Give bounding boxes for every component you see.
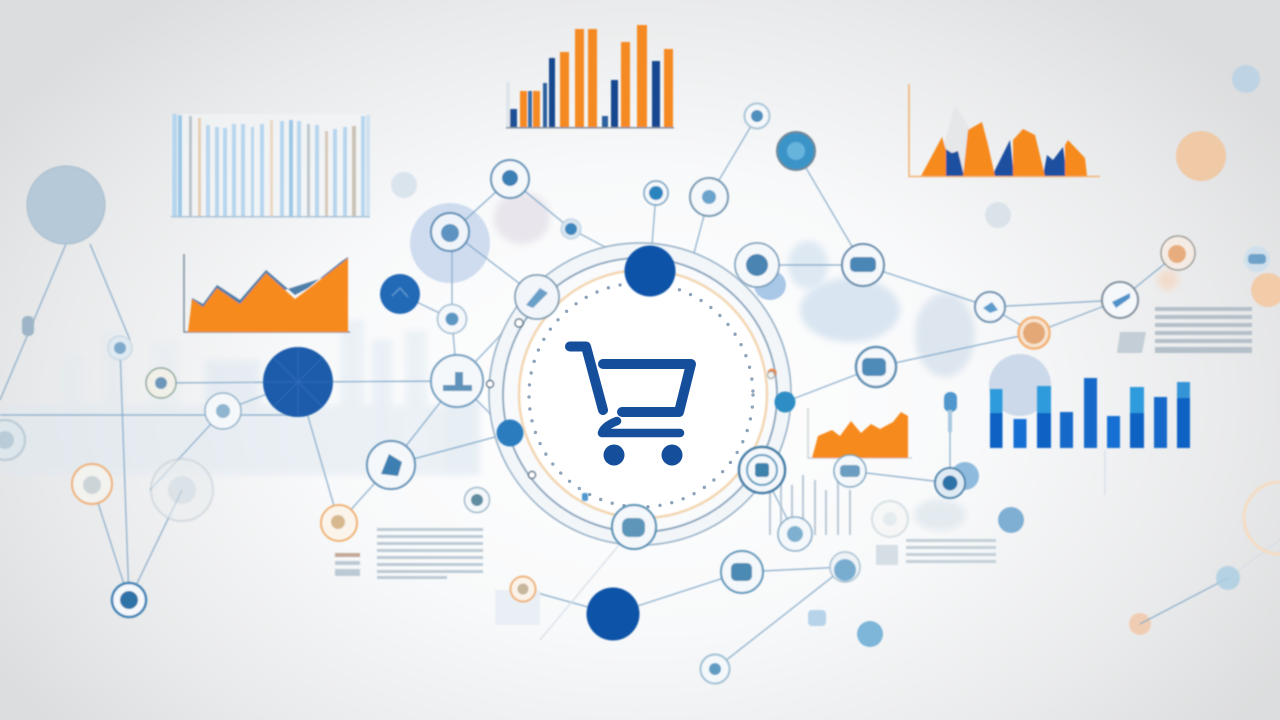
node bbox=[721, 551, 763, 593]
node bbox=[431, 355, 483, 407]
node bbox=[112, 583, 146, 617]
chart: small orange area bbox=[808, 408, 912, 458]
node bbox=[491, 160, 529, 198]
node bbox=[464, 488, 490, 512]
node bbox=[205, 393, 241, 429]
dotted ring bbox=[529, 283, 753, 507]
node bbox=[975, 292, 1005, 322]
icon: ring accent orange bbox=[768, 368, 776, 378]
node: solid blue left bbox=[380, 274, 420, 314]
node bbox=[735, 243, 779, 287]
node: solid left hub bbox=[263, 347, 333, 417]
node bbox=[778, 517, 812, 551]
icon: left pin bbox=[22, 316, 34, 336]
outer rings bbox=[489, 243, 791, 545]
node: solid bottom hub bbox=[586, 588, 640, 640]
node bbox=[431, 213, 469, 251]
node: faint far left bbox=[151, 459, 213, 521]
node bbox=[700, 654, 730, 684]
node: orange ring bbox=[321, 505, 357, 541]
chart: orange and blue mountain area bbox=[909, 84, 1100, 176]
icon: ring accent small bbox=[486, 319, 588, 501]
text block: greeked lines lower right bbox=[876, 539, 996, 565]
node: teal filled top bbox=[777, 132, 815, 170]
network connector lines bbox=[0, 116, 1280, 669]
faint background blobs bbox=[27, 65, 1280, 647]
node bbox=[146, 368, 176, 398]
node: orange bottom bbox=[510, 576, 536, 602]
icon: shopping cart bbox=[570, 346, 691, 466]
node bbox=[612, 505, 656, 549]
node bbox=[935, 468, 965, 498]
hub: central ring with cart bbox=[489, 243, 791, 545]
node: ring hub blue right bbox=[774, 392, 796, 412]
text block: greeked lines lower left bbox=[335, 528, 483, 579]
node: faint edge bbox=[0, 420, 25, 460]
node bbox=[515, 275, 559, 319]
icon: pin marker bbox=[944, 392, 957, 432]
chart: pale thin bars bbox=[171, 114, 370, 218]
node: faint bbox=[872, 501, 908, 537]
node bbox=[438, 304, 466, 334]
node bbox=[856, 347, 896, 387]
node bbox=[108, 336, 132, 360]
text block: greeked lines upper right bbox=[1117, 307, 1252, 353]
node bbox=[690, 178, 728, 216]
node bbox=[830, 552, 860, 582]
faint background dashboard: left bbox=[0, 320, 480, 475]
node: orange filled bbox=[1018, 318, 1050, 348]
right edge orange arc bbox=[1244, 482, 1280, 554]
node: orange ring far left bbox=[72, 464, 112, 504]
node bbox=[744, 104, 770, 128]
node: orange ring right bbox=[1161, 236, 1195, 270]
node: ring hub blue bbox=[496, 420, 524, 446]
node bbox=[644, 181, 668, 205]
chart: right blue bars bbox=[990, 378, 1190, 448]
node bbox=[1102, 282, 1138, 318]
node: right edge bbox=[1244, 246, 1270, 272]
node: faint bbox=[1216, 566, 1240, 590]
node bbox=[842, 244, 884, 286]
chart: orange area left bbox=[184, 254, 350, 332]
faint bar chart under ring bbox=[495, 470, 850, 625]
node bbox=[367, 441, 415, 489]
node bbox=[561, 219, 581, 239]
chart: top blue and orange bars bbox=[506, 25, 674, 128]
node: solid top hub bbox=[624, 246, 676, 296]
node bbox=[739, 447, 785, 493]
node bbox=[834, 455, 866, 487]
